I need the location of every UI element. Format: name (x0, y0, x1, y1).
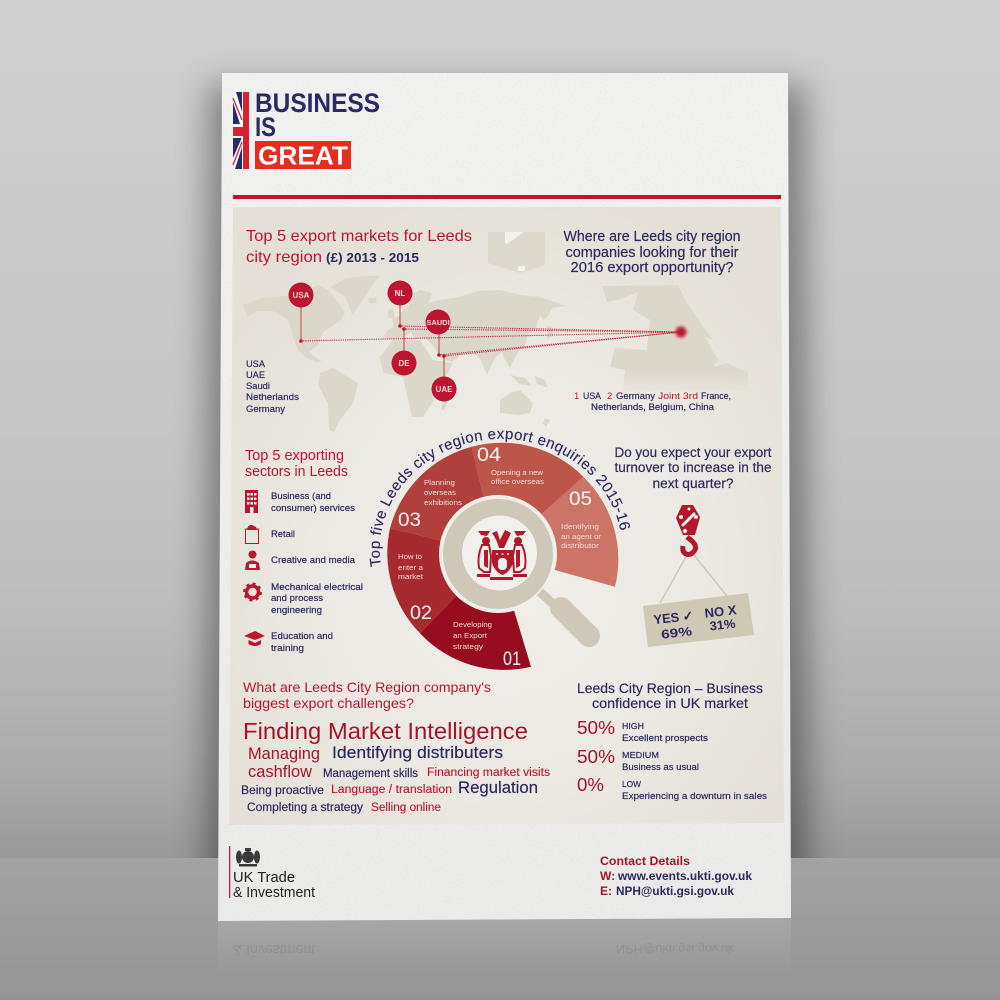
heading: business confidence: confidence in UK market (592, 695, 748, 711)
confidence stats: 50% (577, 747, 615, 767)
heading: turnover question: next quarter? (652, 476, 734, 491)
wedge labels: overseas (424, 488, 456, 497)
label: retail: Retail (271, 529, 295, 539)
numbers: 03 (398, 510, 421, 531)
label: education: training (271, 643, 304, 653)
radial chart: export enquiries (370, 430, 630, 670)
label: business services: consumer) services (271, 503, 356, 513)
base bars (477, 574, 490, 577)
curved title: Top five Leeds city region export enquiries 2015-16 (370, 430, 630, 568)
poster reflection: & Investment (233, 941, 316, 958)
heading: turnover question (614, 445, 772, 491)
logo: Business is Great: BUSINESS (255, 88, 380, 118)
numbers: 01 (503, 649, 521, 670)
pin: Saudi: SAUDI (426, 318, 450, 327)
central content panel (229, 207, 784, 825)
logo: UK Trade & Investment: UK Trade (233, 869, 295, 886)
pin: NL: NL (395, 289, 405, 298)
opportunity ranking text: Netherlands, Belgium, China (591, 402, 715, 413)
label: engineering: and process (271, 593, 324, 603)
icon: shopping bag (246, 525, 258, 544)
sign: yes / no: NO X (704, 602, 738, 621)
heading: 2016 opportunity: companies looking for their (566, 245, 739, 261)
opportunity ranking text: 2 (607, 391, 612, 402)
Leeds marker (676, 326, 686, 338)
word cloud: challenges: Managing (248, 744, 320, 763)
shield (492, 550, 513, 575)
pin: USA: USA (293, 291, 310, 300)
pin: DE (392, 327, 416, 376)
contact details: www.events.ukti.gov.uk (617, 869, 752, 883)
sign: yes / no: 31% (709, 617, 736, 633)
heading: top 5 markets: (£) 2013 - 2015 (326, 250, 419, 265)
word cloud: challenges: Regulation (458, 778, 538, 797)
left owl (478, 545, 491, 572)
poster shadow (205, 85, 810, 918)
heading: exporting sectors: sectors in Leeds (245, 464, 348, 480)
word cloud: challenges: Financing market visits (427, 767, 550, 779)
pin: Saudi (426, 310, 450, 357)
wedge 02 (387, 528, 497, 633)
wedge labels: enter a (398, 563, 424, 572)
top 5 markets list: USA (246, 359, 266, 370)
wedge labels: strategy (453, 642, 483, 651)
pin: DE: DE (398, 359, 410, 368)
confidence stats: 50% (577, 718, 615, 738)
confidence stats: Business as usual (622, 762, 699, 772)
icon: gear (244, 584, 261, 600)
ropes (660, 555, 727, 603)
opportunity ranking text: USA (583, 391, 602, 402)
contact details: NPH@ukti.gsi.gov.uk (616, 884, 734, 898)
leeds coat of arms crest (477, 530, 527, 580)
icon: person at laptop (245, 550, 260, 570)
opportunity ranking text: Joint 3rd (658, 391, 698, 402)
contact details: Contact Details (600, 854, 690, 868)
uk map (602, 285, 748, 390)
heading: top 5 markets: city region (246, 249, 322, 266)
poster reflection (218, 918, 791, 975)
label: business services (271, 491, 356, 513)
opportunity ranking text: Germany (616, 391, 655, 402)
numbers: 04 (477, 445, 501, 466)
label: engineering: Mechanical electrical (271, 582, 363, 592)
poster reflection: NPH@ukti.gsi.gov.uk (616, 942, 735, 956)
contact details: E: (600, 884, 612, 898)
icon: export box (488, 232, 545, 273)
wedge labels: an Export (453, 631, 488, 640)
heading: turnover question: Do you expect your export (614, 445, 772, 460)
heading: 2016 opportunity: Where are Leeds city region (564, 229, 740, 245)
numbers (398, 445, 592, 670)
confidence stats: 0% (577, 775, 604, 795)
heading: export challenges (243, 679, 491, 711)
right owl (513, 545, 526, 572)
top 5 markets list: Saudi (246, 381, 270, 392)
word cloud: challenges: Language / translation (331, 784, 452, 796)
pin: USA (288, 282, 314, 343)
contact details (600, 854, 752, 898)
label: education (271, 631, 333, 653)
confidence stats: Experiencing a downturn in sales (622, 791, 768, 801)
pin: UAE: UAE (436, 385, 453, 394)
confidence stats: Excellent prospects (622, 733, 709, 743)
wedge labels: Planning (424, 478, 455, 487)
top 5 markets list: Netherlands (246, 392, 299, 403)
label: creative and media: Creative and media (271, 555, 355, 565)
label: engineering: engineering (271, 605, 322, 615)
route lines to Leeds (301, 326, 681, 356)
confidence stats: HIGH (622, 721, 644, 731)
wedge labels: exhibitions (424, 498, 462, 507)
logo: Business is Great: GREAT (258, 140, 348, 170)
numbers: 05 (569, 489, 592, 510)
heading: export challenges: biggest export challenges? (243, 695, 414, 711)
icon: royal crest (236, 848, 260, 866)
confidence stats (577, 718, 768, 801)
word cloud: challenges: cashflow (248, 762, 313, 781)
wedge labels: Developing (453, 620, 492, 629)
logo: Business is Great: IS (255, 112, 276, 142)
icon: office building (245, 490, 258, 513)
wedge labels: Identifying (561, 522, 599, 531)
label: education: Education and (271, 631, 333, 641)
wedge 01 (420, 554, 531, 670)
heading: exporting sectors: Top 5 exporting (245, 448, 344, 464)
top 5 markets list: Germany (246, 404, 285, 415)
heading: 2016 opportunity (564, 229, 740, 276)
wedge labels: office overseas (491, 477, 544, 486)
heading: export challenges: What are Leeds City Region company's (243, 679, 491, 695)
wedge 05 (497, 477, 618, 587)
crest helmets (478, 531, 526, 536)
wedge 03 (390, 447, 497, 554)
heading: top 5 markets: Top 5 export markets for Leeds (246, 228, 472, 245)
pin: UAE (432, 354, 456, 402)
sectors list (244, 490, 363, 653)
wedge labels: market (398, 572, 424, 581)
opportunity ranking text: France, (701, 391, 731, 402)
floor (0, 858, 1000, 1000)
world map (243, 275, 566, 432)
wedge labels (398, 468, 602, 651)
word cloud: challenges: Identifying distributers (332, 743, 503, 762)
word cloud: challenges: Selling online (371, 802, 441, 814)
heading: business confidence: Leeds City Region – Business (577, 680, 763, 696)
heading: exporting sectors (245, 448, 348, 480)
top 5 markets list (246, 359, 299, 415)
confidence stats: LOW (622, 779, 641, 789)
word cloud: challenges: Being proactive (241, 785, 324, 797)
heading: top 5 markets (246, 228, 472, 266)
logo: Business is Great (233, 88, 380, 170)
numbers: 02 (410, 603, 432, 624)
word cloud: challenges: Completing a strategy (247, 802, 363, 814)
opportunity ranking text (574, 391, 731, 413)
sign: yes / no: YES ✓ (653, 608, 694, 627)
market pins (288, 280, 456, 402)
magnifier (439, 495, 589, 636)
heading: business confidence (577, 680, 763, 711)
poster sheet (218, 73, 791, 921)
heading: turnover question: turnover to increase in the (614, 460, 772, 475)
logo: UK Trade & Investment (229, 846, 316, 901)
crane hook with sign (643, 505, 754, 647)
wedge labels: How to (398, 552, 422, 561)
icon: crane hook (676, 505, 700, 554)
wedge labels: Opening a new (491, 468, 544, 477)
word cloud: challenges: Management skills (323, 768, 418, 780)
opportunity ranking text: 1 (574, 391, 579, 402)
icon: union flag (233, 92, 249, 169)
centre owl (492, 530, 511, 548)
wedge 04 (472, 443, 583, 554)
sign: yes / no (643, 593, 754, 647)
label: engineering (271, 582, 363, 615)
word cloud: challenges: Finding Market Intelligence (243, 718, 528, 744)
label: business services: Business (and (271, 491, 331, 501)
confidence stats: MEDIUM (622, 750, 659, 760)
sign: yes / no: 69% (660, 624, 693, 642)
top 5 markets list: UAE (246, 370, 265, 381)
wedge labels: distributor (561, 541, 600, 550)
icon: mortar board (244, 631, 265, 646)
heading: 2016 opportunity: 2016 export opportunity? (570, 260, 734, 276)
logo: UK Trade & Investment: & Investment (233, 884, 316, 901)
red divider rule (233, 195, 781, 199)
wedge labels: an agent or (561, 532, 602, 541)
word cloud: challenges (241, 718, 550, 814)
contact details: W: (600, 869, 615, 883)
pin: NL (388, 280, 412, 328)
